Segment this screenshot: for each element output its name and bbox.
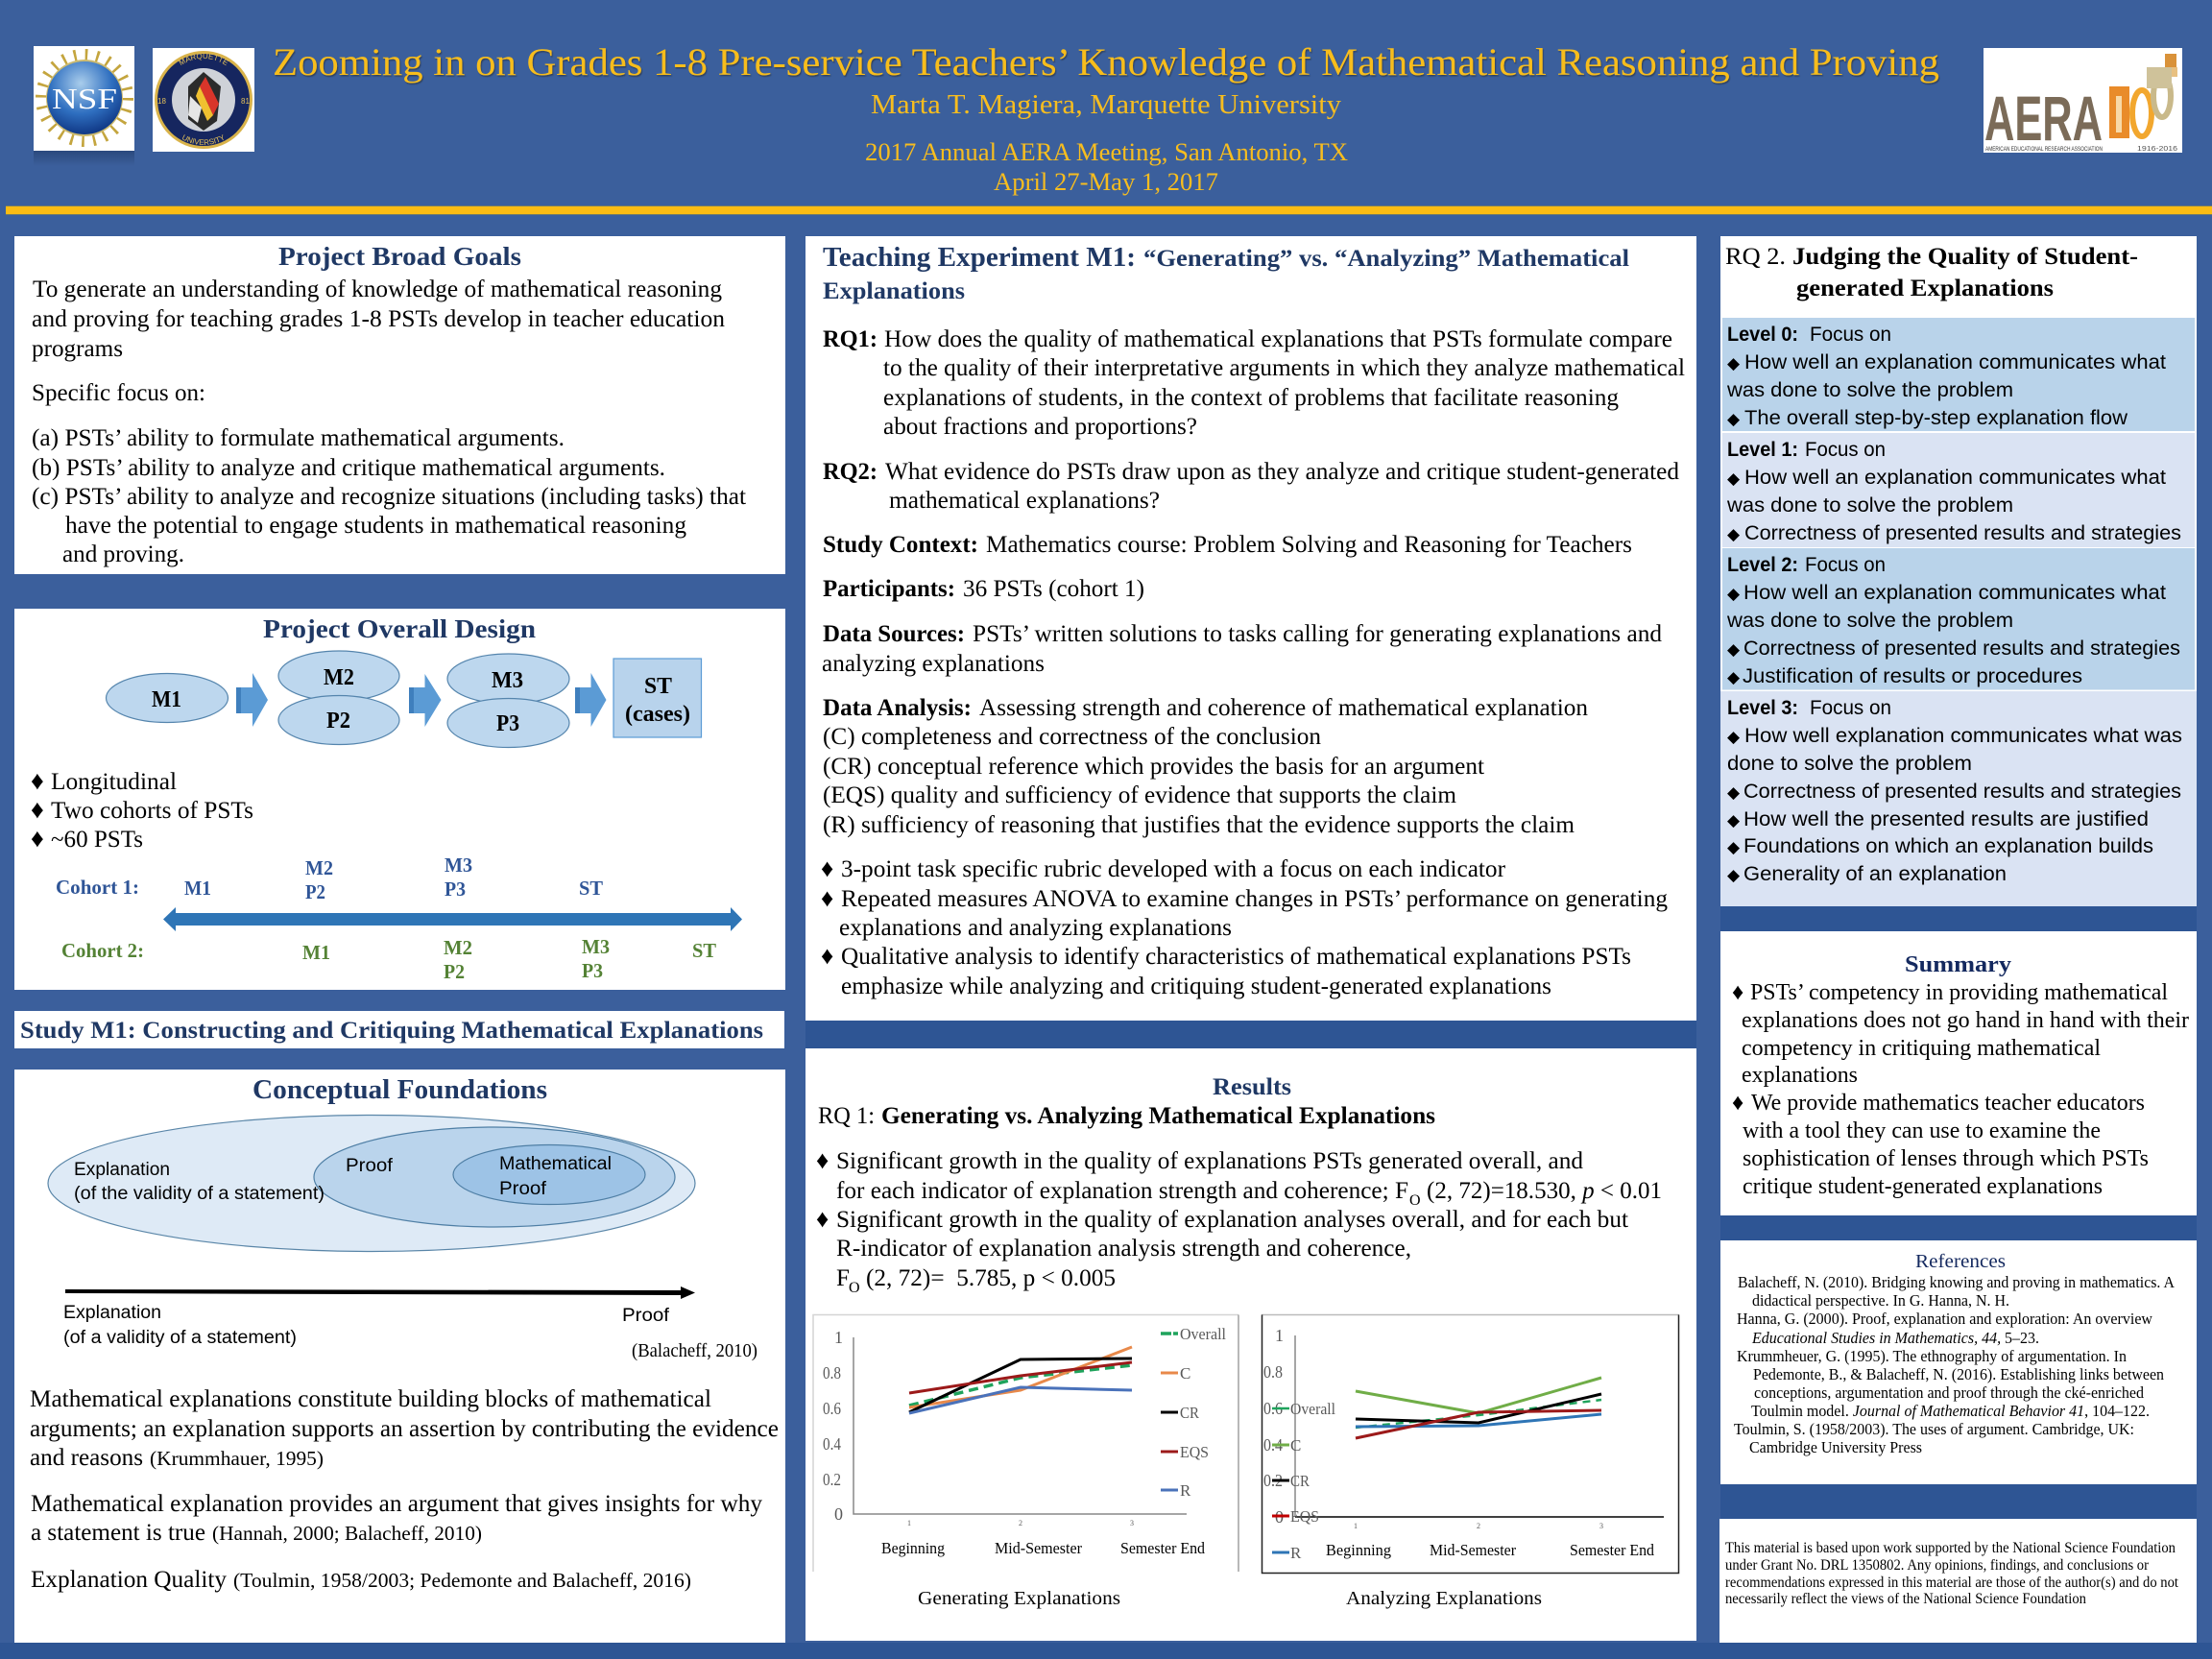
text block: study details: Study Context: xyxy=(823,532,978,558)
text block: research questions: What evidence do PSTs draw upon as they analyze and critique student-generated xyxy=(885,459,1679,485)
nested ellipse diagram xyxy=(48,1116,695,1252)
axis labels: Proof xyxy=(622,1306,670,1326)
line chart: generating explanations: Overall xyxy=(1180,1325,1226,1343)
text block: method bullets: ♦ xyxy=(821,942,833,970)
text block: research questions: to the quality of their interpretative arguments in which they analyze mathematical xyxy=(883,355,1685,381)
icon: AERA 100 logo: AERA xyxy=(1984,83,2103,154)
heading xyxy=(823,243,1629,304)
text block: summary bullets: We provide mathematics teacher educators xyxy=(1751,1091,2145,1116)
line chart: analyzing explanations: 3 xyxy=(1599,1522,1603,1530)
line chart: analyzing explanations xyxy=(1262,1315,1679,1609)
text block: data analysis: Data Analysis: xyxy=(823,695,972,721)
level 0: Focus on xyxy=(1810,324,1891,346)
text block: study details: 36 PSTs (cohort 1) xyxy=(963,576,1144,602)
text block: goals: and proving. xyxy=(62,541,184,567)
level 0: was done to solve the problem xyxy=(1726,379,2013,401)
text block: method bullets: Repeated measures ANOVA to examine changes in PSTs’ performance on generating xyxy=(841,886,1669,912)
level 2: ◆ xyxy=(1727,640,1741,659)
timeline: cohort 2 xyxy=(61,935,716,983)
heading: Explanations xyxy=(823,278,965,304)
text block: summary bullets: ♦ xyxy=(1732,1091,1743,1116)
text block: findings: (2, 72)= 5.785, p < 0.005 xyxy=(866,1265,1116,1291)
flow diagram xyxy=(106,651,701,747)
timeline: cohort 2: M3 xyxy=(582,935,610,958)
heading: Project Overall Design xyxy=(263,614,536,643)
text block: summary bullets: explanations xyxy=(1742,1063,1858,1088)
heading: Judging the Quality of Student- xyxy=(1792,244,2138,270)
text block: findings: ♦ xyxy=(816,1146,829,1174)
icon: NSF logo: NSF xyxy=(52,82,117,115)
line chart: generating explanations: 1 xyxy=(907,1519,911,1527)
panel: project broad goals xyxy=(14,236,785,574)
line chart: generating explanations: 1 xyxy=(834,1328,843,1347)
line chart: analyzing explanations: 1 xyxy=(1354,1522,1358,1530)
text block: reference list: Krummheuer, G. (1995). The ethnography of argumentation. In xyxy=(1737,1347,2127,1365)
text block: study details: analyzing explanations xyxy=(822,651,1045,677)
panel: results xyxy=(805,1048,1696,1641)
text block: goals: To generate an understanding of knowledge of mathematical reasoning xyxy=(33,276,723,302)
level 1: How well an explanation communicates what xyxy=(1744,467,2166,489)
line chart: analyzing explanations: CR xyxy=(1290,1472,1310,1490)
dates: April 27-May 1, 2017 xyxy=(994,168,1218,196)
timeline: cohort 1: ST xyxy=(579,877,603,900)
line chart: generating explanations: C xyxy=(1180,1364,1190,1382)
icon: AERA 100 logo: 1916-2016 xyxy=(2137,146,2177,153)
timeline: cohort 1: Cohort 1: xyxy=(56,876,139,899)
author: Marta T. Magiera, Marquette University xyxy=(871,89,1342,120)
line chart: generating explanations: 0.8 xyxy=(823,1363,841,1382)
timeline: cohort 1 xyxy=(56,854,603,903)
text block: method bullets: emphasize while analyzing and critiquing student-generated explanations xyxy=(841,974,1551,999)
text block: research questions: explanations of students, in the context of problems that facilitate reasoning xyxy=(883,385,1620,411)
line chart: generating explanations: 0.6 xyxy=(823,1399,841,1418)
panel: study heading: Study M1: Constructing and Critiquing Mathematical Explanations xyxy=(20,1018,763,1044)
line chart: generating explanations: Mid-Semester xyxy=(995,1539,1082,1557)
heading: RQ 2. xyxy=(1725,244,1786,270)
text block: definitions: arguments; an explanation supports an assertion by contributing the evidence xyxy=(30,1416,779,1442)
timeline: cohort 2: M1 xyxy=(302,941,330,964)
line chart: analyzing explanations: R xyxy=(1290,1544,1302,1562)
text block: findings: Significant growth in the quality of explanations PSTs generated overall, and xyxy=(836,1148,1584,1174)
M2: M2 xyxy=(324,665,354,690)
text block: definitions xyxy=(30,1386,779,1593)
text block: findings xyxy=(816,1146,1662,1296)
line chart: generating explanations: Semester End xyxy=(1120,1539,1205,1557)
text block: study details: Data Sources: xyxy=(823,621,965,647)
line chart: analyzing explanations: Mid-Semester xyxy=(1430,1541,1516,1559)
panel: study heading xyxy=(14,1011,784,1048)
level 2: How well an explanation communicates what xyxy=(1743,582,2166,604)
M1: M1 xyxy=(152,687,181,712)
level 0: ◆ xyxy=(1727,354,1741,373)
text block: definitions: (Hannah, 2000; Balacheff, 2010) xyxy=(212,1522,482,1545)
text block: study details: Participants: xyxy=(823,576,955,602)
text block: summary bullets xyxy=(1732,980,2189,1199)
line chart: analyzing explanations: EQS xyxy=(1290,1507,1319,1526)
level 0: Level 0: xyxy=(1727,324,1798,346)
panel: RQ2 rubric xyxy=(1720,236,2197,906)
heading: generated Explanations xyxy=(1796,276,2054,301)
panel: funding acknowledgement: recommendations expressed in this material are those of the author(s) and do not xyxy=(1725,1575,2179,1591)
level 1: Correctness of presented results and strategies xyxy=(1744,522,2181,544)
line chart: generating explanations: 2 xyxy=(1019,1519,1022,1527)
gold divider xyxy=(6,205,2212,215)
level 3: Foundations on which an explanation builds xyxy=(1743,835,2153,857)
icon: Marquette University seal: MARQUETTE xyxy=(179,54,228,65)
text block: definitions: Mathematical explanation provides an argument that gives insights for why xyxy=(31,1491,762,1517)
text block: method bullets: explanations and analyzing explanations xyxy=(839,915,1232,941)
timeline: cohort 2: Cohort 2: xyxy=(61,939,144,962)
heading xyxy=(1725,244,2138,301)
text block: reference list xyxy=(1734,1273,2176,1456)
line chart: analyzing explanations: C xyxy=(1290,1436,1301,1455)
panel: conceptual foundations xyxy=(14,1070,785,1643)
ST cases box xyxy=(613,659,701,737)
timeline: cohort 2: P3 xyxy=(582,959,603,982)
line chart: analyzing explanations: Analyzing Explanations xyxy=(1346,1588,1542,1609)
panel: funding acknowledgement: This material is based upon work supported by the National Science Foundation xyxy=(1725,1540,2176,1556)
level 1: ◆ xyxy=(1727,469,1741,488)
icon: Marquette University seal: 81 xyxy=(241,97,250,106)
text block: findings: (2, 72)=18.530, p < 0.01 xyxy=(1427,1178,1662,1204)
level 3: Correctness of presented results and strategies xyxy=(1743,781,2181,803)
level 3: ◆ xyxy=(1727,811,1741,830)
text block: research questions: How does the quality of mathematical explanations that PSTs formulate compare xyxy=(884,326,1672,352)
text block: research questions: about fractions and proportions? xyxy=(883,414,1197,440)
line chart: analyzing explanations: 0.8 xyxy=(1263,1362,1283,1382)
line chart: analyzing explanations: 0.2 xyxy=(1263,1471,1283,1490)
heading: References xyxy=(1915,1251,2006,1272)
P2 xyxy=(278,695,399,745)
heading: “Generating” vs. “Analyzing” Mathematical xyxy=(1143,246,1629,272)
line chart: generating explanations xyxy=(813,1315,1238,1609)
text block: reference list: Educational Studies in Mathematics, 44, 5–23. xyxy=(1751,1329,2039,1347)
text block: design bullets: ♦ xyxy=(31,824,44,853)
text block: findings: ♦ xyxy=(816,1205,829,1233)
P2: P2 xyxy=(326,709,350,733)
level 1: ◆ xyxy=(1727,525,1741,543)
text block: definitions: (Krummhauer, 1995) xyxy=(150,1447,324,1470)
text block: findings: O xyxy=(849,1280,860,1296)
line chart: generating explanations: 0.2 xyxy=(823,1470,841,1489)
text block: data analysis: (EQS) quality and sufficiency of evidence that supports the claim xyxy=(823,782,1457,808)
text block: design bullets xyxy=(31,766,253,853)
axis labels: (Balacheff, 2010) xyxy=(632,1340,757,1361)
text block: method bullets: 3-point task specific rubric developed with a focus on each indicator xyxy=(841,856,1506,882)
text block: data analysis: Assessing strength and coherence of mathematical explanation xyxy=(979,695,1588,721)
line chart: generating explanations: 0.4 xyxy=(823,1434,841,1454)
level 0: The overall step-by-step explanation flow xyxy=(1744,407,2128,429)
level 2: ◆ xyxy=(1727,668,1741,686)
level 3: ◆ xyxy=(1727,866,1741,884)
timeline: cohort 2: ST xyxy=(692,939,716,962)
panel: teaching experiment xyxy=(805,236,1696,1021)
level 2: Correctness of presented results and strategies xyxy=(1743,637,2180,660)
level 3: ◆ xyxy=(1727,838,1741,856)
level 2: was done to solve the problem xyxy=(1726,610,2013,632)
timeline: cohort 1: M3 xyxy=(445,854,472,877)
text block: design bullets: ♦ xyxy=(31,766,44,795)
line chart: analyzing explanations: Overall xyxy=(1290,1400,1335,1418)
text block: summary bullets: explanations does not go hand in hand with their xyxy=(1742,1008,2189,1033)
level 1: Level 1: xyxy=(1727,439,1798,461)
text block: definitions: and reasons xyxy=(30,1445,143,1471)
panel: summary xyxy=(1720,931,2197,1215)
level 3: ◆ xyxy=(1727,783,1741,802)
text block: design bullets: Two cohorts of PSTs xyxy=(51,798,253,824)
nested ellipse diagram: (of the validity of a statement) xyxy=(74,1184,325,1204)
panel: project overall design xyxy=(14,609,785,990)
subheading: RQ 1: xyxy=(818,1103,875,1129)
level 3: ◆ xyxy=(1727,728,1741,746)
text block: definitions: (Toulmin, 1958/2003; Pedemonte and Balacheff, 2016) xyxy=(233,1569,691,1592)
timeline arrow xyxy=(163,907,742,931)
text block: reference list: Balacheff, N. (2010). Bridging knowing and proving in mathematics. A xyxy=(1738,1273,2176,1291)
level 3: done to solve the problem xyxy=(1727,753,1972,775)
text block: method bullets: Qualitative analysis to identify characteristics of mathematical explanations PSTs xyxy=(841,944,1631,970)
level 0: ◆ xyxy=(1727,410,1741,428)
level 0 xyxy=(1722,318,2195,431)
level 3: How well the presented results are justified xyxy=(1743,808,2149,830)
text block: reference list: Hanna, G. (2000). Proof, explanation and exploration: An overview xyxy=(1737,1310,2153,1328)
text block: goals: (c) PSTs’ ability to analyze and recognize situations (including tasks) that xyxy=(32,484,746,510)
text block: findings: Significant growth in the quality of explanation analyses overall, and for each but xyxy=(836,1207,1628,1233)
level 1: Focus on xyxy=(1805,439,1886,461)
header xyxy=(6,40,2212,215)
level 3: Focus on xyxy=(1810,697,1891,719)
timeline: cohort 2: M2 xyxy=(444,936,472,959)
icon: Marquette University seal: UNIVERSITY xyxy=(182,134,224,146)
line chart: generating explanations: Generating Explanations xyxy=(918,1588,1120,1609)
line chart: analyzing explanations: 0.6 xyxy=(1263,1399,1283,1418)
text block: reference list: conceptions, argumentation and proof through the cké-enriched xyxy=(1754,1383,2144,1402)
text block: method bullets: ♦ xyxy=(821,884,833,912)
level 2: Focus on xyxy=(1805,554,1886,576)
text block: data analysis: (R) sufficiency of reasoning that justifies that the evidence supports the claim xyxy=(823,812,1575,838)
text block: goals: programs xyxy=(32,336,123,362)
text block: study details: PSTs’ written solutions to tasks calling for generating explanations and xyxy=(973,621,1662,647)
timeline: cohort 2: P2 xyxy=(444,960,465,983)
text block: reference list: Toulmin model. Journal of Mathematical Behavior 41, 104–122. xyxy=(1751,1402,2150,1420)
P3 xyxy=(447,699,569,747)
icon: NSF logo xyxy=(34,46,134,166)
line chart: analyzing explanations: 0.4 xyxy=(1263,1435,1283,1455)
text block: research questions: RQ2: xyxy=(823,459,878,485)
line chart: analyzing explanations: Semester End xyxy=(1570,1541,1654,1559)
heading: Results xyxy=(1213,1074,1291,1100)
axis labels xyxy=(63,1303,757,1361)
line chart: generating explanations: Beginning xyxy=(881,1539,945,1557)
P3: P3 xyxy=(496,711,519,736)
text block: reference list: Toulmin, S. (1958/2003). The uses of argument. Cambridge, UK: xyxy=(1734,1420,2134,1438)
level 2: Level 2: xyxy=(1727,554,1798,576)
text block: findings: O xyxy=(1409,1192,1421,1209)
line chart: generating explanations: R xyxy=(1180,1481,1191,1500)
level 2: Justification of results or procedures xyxy=(1743,665,2082,687)
M3 xyxy=(447,654,569,704)
line chart: generating explanations: EQS xyxy=(1180,1443,1209,1461)
text block: method bullets xyxy=(821,854,1669,999)
panel: funding acknowledgement: under Grant No. DRL 1350802. Any opinions, findings, and conclusions or xyxy=(1725,1557,2150,1574)
text block: study details: Mathematics course: Problem Solving and Reasoning for Teachers xyxy=(986,532,1632,558)
text block: research questions: mathematical explanations? xyxy=(889,488,1160,514)
text block: definitions: a statement is true xyxy=(31,1520,205,1546)
text block: data analysis xyxy=(823,695,1588,838)
text block: design bullets: ~60 PSTs xyxy=(51,827,143,853)
icon: Marquette University seal xyxy=(153,48,254,152)
text block: goals: Specific focus on: xyxy=(32,380,205,406)
text block: reference list: Cambridge University Press xyxy=(1749,1438,1922,1456)
text block: summary bullets: with a tool they can use to examine the xyxy=(1743,1118,2101,1143)
text block: goals: have the potential to engage students in mathematical reasoning xyxy=(65,513,687,539)
level 1 xyxy=(1722,433,2195,547)
level 0: How well an explanation communicates what xyxy=(1744,351,2166,373)
text block: findings: F xyxy=(836,1265,850,1291)
line chart: analyzing explanations: 2 xyxy=(1477,1522,1480,1530)
text block: goals xyxy=(32,276,746,567)
text block: reference list: didactical perspective. In G. Hanna, N. H. xyxy=(1752,1291,2009,1310)
arrow xyxy=(575,673,607,727)
meeting: 2017 Annual AERA Meeting, San Antonio, TX xyxy=(865,138,1348,166)
M2 xyxy=(278,651,399,701)
panel: funding acknowledgement: necessarily reflect the views of the National Science Foundation xyxy=(1725,1591,2086,1607)
text block: summary bullets: PSTs’ competency in providing mathematical xyxy=(1750,980,2168,1005)
text block: study details xyxy=(822,532,1662,677)
ST cases box: (cases) xyxy=(625,702,690,727)
level 3 xyxy=(1720,691,2197,906)
arrow xyxy=(236,673,268,727)
line chart: analyzing explanations: Beginning xyxy=(1326,1541,1391,1559)
panel: references xyxy=(1720,1240,2197,1484)
text block: summary bullets: sophistication of lenses through which PSTs xyxy=(1743,1146,2149,1171)
arrow xyxy=(409,674,442,727)
line chart: analyzing explanations: 0 xyxy=(1275,1507,1284,1527)
text block: research questions: RQ1: xyxy=(823,326,878,352)
text block: data analysis: (C) completeness and correctness of the conclusion xyxy=(823,724,1321,750)
text block: findings: R-indicator of explanation analysis strength and coherence, xyxy=(836,1236,1411,1262)
heading: Teaching Experiment M1: xyxy=(823,243,1136,273)
M1 xyxy=(106,674,228,722)
ST cases box: ST xyxy=(644,674,672,699)
text block: research questions xyxy=(823,326,1685,514)
axis labels: Explanation xyxy=(63,1303,161,1323)
text block: reference list: Pedemonte, B., & Balacheff, N. (2016). Establishing links between xyxy=(1753,1365,2164,1383)
text block: definitions: Explanation Quality xyxy=(31,1567,227,1593)
icon: AERA 100 logo xyxy=(1984,48,2182,154)
panel: funding acknowledgement xyxy=(1719,1519,2197,1643)
text block: design bullets: Longitudinal xyxy=(51,769,177,795)
level 2: ◆ xyxy=(1727,585,1741,603)
level 3: Generality of an explanation xyxy=(1743,863,2007,885)
icon: AERA 100 logo: AMERICAN EDUCATIONAL RESEARCH ASSOCIATION xyxy=(1985,147,2103,153)
text block: definitions: Mathematical explanations constitute building blocks of mathematical xyxy=(30,1386,711,1412)
text block: findings: for each indicator of explanation strength and coherence; F xyxy=(836,1178,1408,1204)
nested ellipse diagram: Explanation xyxy=(74,1160,170,1180)
text block: summary bullets: critique student-generated explanations xyxy=(1743,1174,2103,1199)
level 2 xyxy=(1722,548,2195,689)
text block: goals: and proving for teaching grades 1-8 PSTs develop in teacher education xyxy=(32,306,725,332)
axis labels: (of a validity of a statement) xyxy=(63,1328,297,1348)
text block: goals: (a) PSTs’ ability to formulate mathematical arguments. xyxy=(32,425,565,451)
text block: summary bullets: competency in critiquing mathematical xyxy=(1742,1036,2101,1061)
arrow: explanation to proof xyxy=(65,1286,695,1299)
timeline: cohort 1: P2 xyxy=(305,880,325,903)
level 3: How well explanation communicates what was xyxy=(1744,725,2182,747)
line chart: analyzing explanations: 1 xyxy=(1275,1326,1284,1345)
text block: goals: (b) PSTs’ ability to analyze and critique mathematical arguments. xyxy=(32,455,665,481)
heading: Project Broad Goals xyxy=(278,242,521,271)
timeline: cohort 1: M1 xyxy=(184,877,211,900)
text block: method bullets: ♦ xyxy=(821,854,833,882)
subheading: Generating vs. Analyzing Mathematical Explanations xyxy=(881,1103,1435,1129)
timeline: cohort 1: P3 xyxy=(445,878,466,901)
M3: M3 xyxy=(492,668,523,693)
line chart: generating explanations: 0 xyxy=(834,1504,843,1524)
level 3: Level 3: xyxy=(1727,697,1798,719)
icon: Marquette University seal: 18 xyxy=(157,97,166,106)
heading: Summary xyxy=(1905,952,2011,977)
nested ellipse diagram: Proof xyxy=(499,1179,547,1199)
line chart: generating explanations: CR xyxy=(1180,1404,1200,1422)
timeline: cohort 1: M2 xyxy=(305,856,333,879)
text block: design bullets: ♦ xyxy=(31,795,44,824)
heading: Conceptual Foundations xyxy=(252,1075,547,1105)
nested ellipse diagram: Mathematical xyxy=(499,1154,612,1174)
nested ellipse diagram: Proof xyxy=(346,1156,394,1176)
line chart: generating explanations: 3 xyxy=(1130,1519,1134,1527)
text block: data analysis: (CR) conceptual reference which provides the basis for an argument xyxy=(823,754,1484,780)
level 1: was done to solve the problem xyxy=(1726,494,2013,517)
text block: summary bullets: ♦ xyxy=(1732,980,1743,1005)
title: Zooming in on Grades 1-8 Pre-service Teachers’ Knowledge of Mathematical Reasoning and Proving xyxy=(273,40,1939,84)
